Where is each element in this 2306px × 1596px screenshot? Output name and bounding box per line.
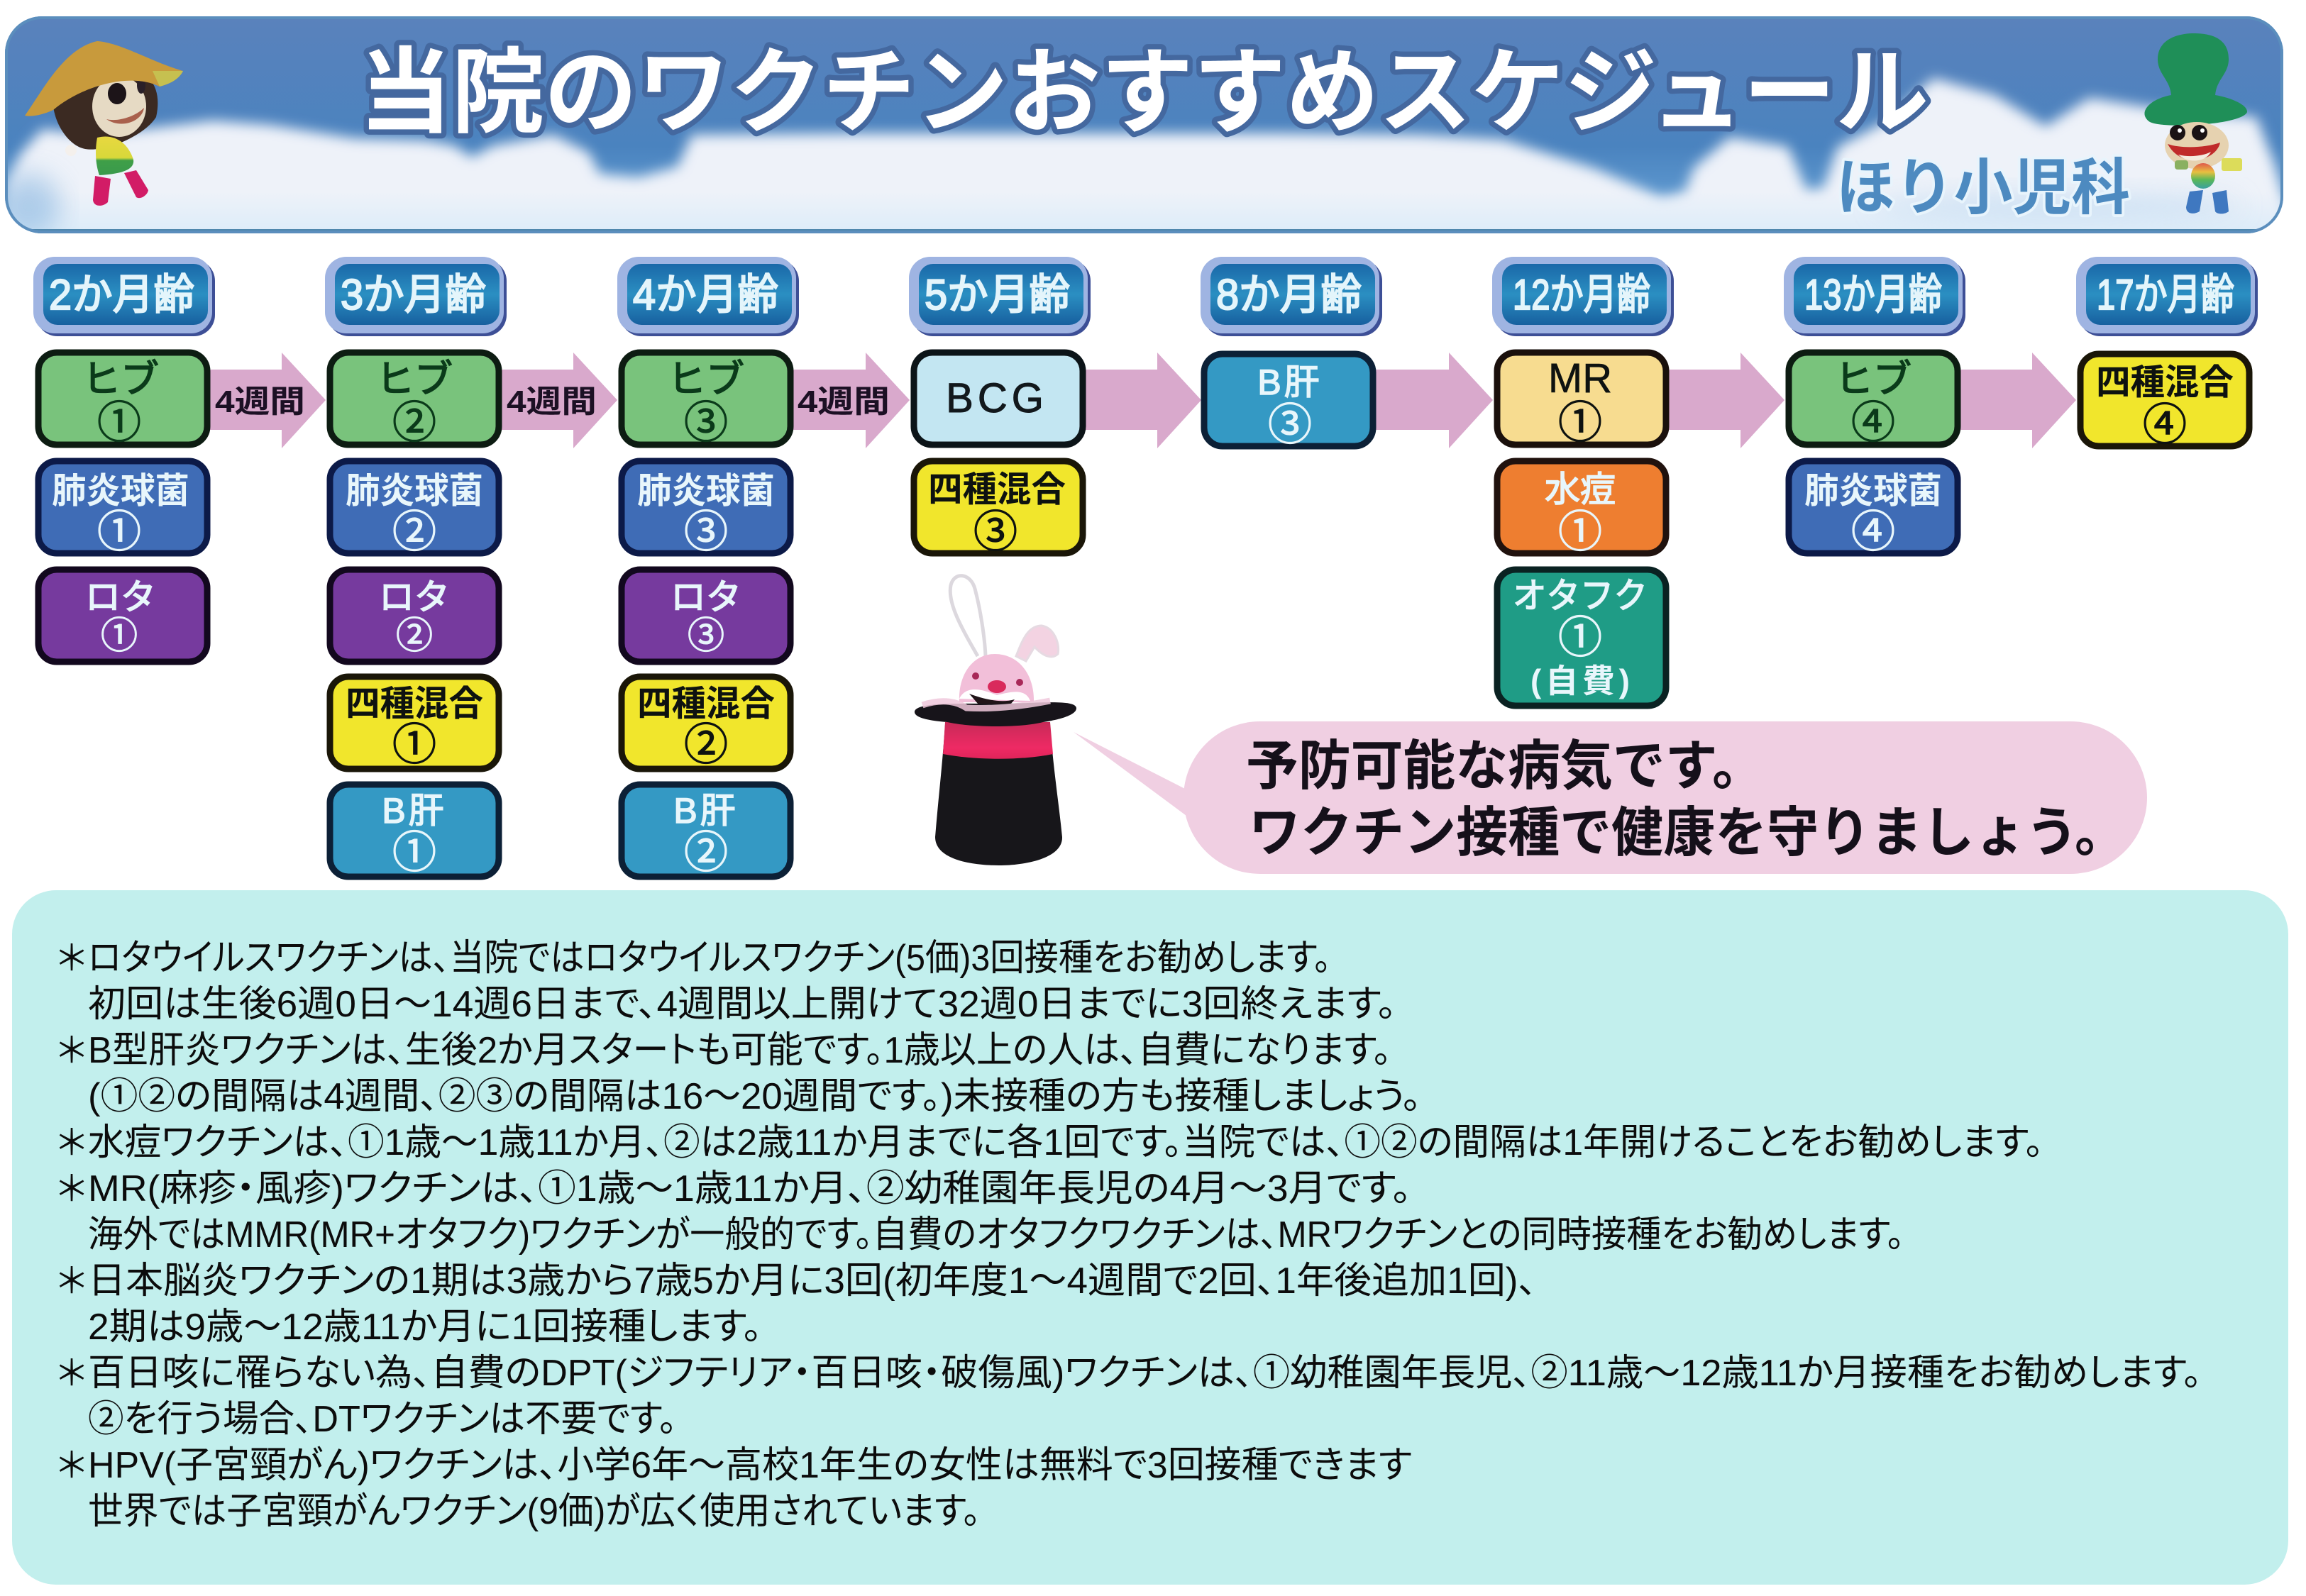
box: rota 2: ロタ (379, 577, 450, 617)
arrow: 4 to 5 months, 4 weeks: 4週間 (798, 384, 890, 419)
box: varicella 1 (1497, 461, 1666, 557)
box: pneumococcal 3 (622, 461, 790, 557)
box: MR 1: ① (1558, 399, 1602, 448)
box: DPT-IPV 4: ④ (2143, 401, 2187, 450)
arrow: 8 to 12 months (1374, 353, 1493, 448)
box: DPT-IPV 3: ③ (973, 508, 1017, 557)
note: hepatitis B: ＊ (54, 1031, 89, 1070)
box: Hib 3: ヒブ (668, 358, 744, 401)
age badge: 2 months (33, 257, 215, 336)
note: MR: 海外ではMMR(MR+オタフク)ワクチンが一般的です。自費のオタフクワクチンは、MRワクチンとの同時接種をお勧めします。 (88, 1214, 1904, 1256)
box: hepatitis B 3: B肝 (1257, 362, 1323, 402)
box: rota 1: ① (101, 616, 138, 657)
arrow: 2 to 3 months, 4 weeks: 4週間 (215, 384, 305, 419)
arrow: 2 to 3 months, 4 weeks (209, 353, 326, 448)
box: DPT-IPV 2: 四種混合 (637, 684, 775, 724)
callout: speech bubble: ワクチン接種で健康を守りましょう。 (1249, 803, 2126, 863)
arrow: 5 to 8 months (1083, 353, 1201, 448)
box: pneumococcal 4: 肺炎球菌 (1804, 471, 1942, 511)
note: MR: MR(麻疹・風疹)ワクチンは、①1歳～1歳11か月、②幼稚園年長児の4月～3月です。 (88, 1168, 1411, 1209)
box: mumps 1 self-paid (1497, 570, 1666, 706)
age badge: 3 months (325, 257, 507, 336)
age badge: 3 months: 3か月齢 (341, 271, 486, 318)
box: mumps 1 self-paid: ① (1558, 614, 1602, 663)
box: DPT-IPV 4 (2080, 354, 2249, 450)
box: DPT-IPV 2 (622, 677, 790, 770)
icon: girl character with straw hat (25, 41, 183, 206)
box: hepatitis B 3 (1204, 354, 1373, 450)
callout: speech bubble: 予防可能な病気です。 (1246, 736, 1765, 797)
note: rotavirus: ＊ (54, 938, 89, 978)
note: DPT (54, 1353, 2202, 1440)
title: 当院のワクチンおすすめスケジュール (359, 40, 1929, 145)
arrow: 3 to 4 months, 4 weeks (500, 353, 617, 448)
box: pneumococcal 1: 肺炎球菌 (52, 471, 189, 511)
box: hepatitis B 1 (330, 785, 499, 877)
box: DPT-IPV 3 (914, 461, 1083, 557)
age badge: 13 months (1784, 257, 1965, 336)
box: BCG (914, 353, 1083, 445)
box: Hib 2 (330, 353, 499, 448)
note: Japanese encephalitis: 2期は9歳～12歳11か月に1回接種します。 (88, 1307, 762, 1348)
note: Japanese encephalitis (54, 1260, 1537, 1348)
note: DPT: ＊ (54, 1353, 89, 1393)
box: rota 3 (622, 570, 790, 662)
arrow: 13 to 17 months (1958, 353, 2076, 448)
box: DPT-IPV 1: ① (392, 721, 436, 770)
note: rotavirus: 初回は生後6週0日～14週6日まで、4週間以上開けて32週0日までに3回終えます。 (88, 984, 1396, 1025)
icon: boy character with green hat (2144, 33, 2247, 214)
arrow: 3 to 4 months, 4 weeks: 4週間 (507, 384, 597, 419)
age badge: 2 months: 2か月齢 (49, 271, 194, 318)
box: Hib 3 (622, 353, 790, 448)
box: DPT-IPV 2: ② (684, 721, 728, 770)
box: DPT-IPV 1: 四種混合 (346, 684, 483, 724)
box: rota 2 (330, 570, 499, 662)
box: Hib 4: ④ (1851, 399, 1895, 448)
box: rota 1 (38, 570, 207, 662)
box: pneumococcal 2: 肺炎球菌 (346, 471, 483, 511)
box: BCG: BCG (946, 375, 1048, 421)
header banner (0, 16, 2288, 241)
box: mumps 1 self-paid: オタフク (1513, 576, 1648, 616)
note: DPT: 百日咳に罹らない為、自費のDPT(ジフテリア・百日咳・破傷風)ワクチンは、①幼稚園年長児、②11歳～12歳11か月接種をお勧めします。 (88, 1353, 2202, 1394)
age badge: 8 months (1201, 257, 1382, 336)
arrow: 12 to 13 months (1667, 353, 1784, 448)
note: Japanese encephalitis: ＊ (54, 1261, 89, 1301)
box: Hib 1: ヒブ (82, 358, 159, 401)
box: pneumococcal 4: ④ (1851, 508, 1895, 557)
box: DPT-IPV 3: 四種混合 (928, 470, 1066, 509)
note: MR: ＊ (54, 1169, 89, 1209)
icon: rabbit in magician's hat (915, 576, 1076, 865)
box: Hib 2: ヒブ (376, 358, 453, 401)
age badge: 5 months: 5か月齢 (925, 271, 1070, 318)
panel: notes (12, 890, 2288, 1585)
box: hepatitis B 2: ② (684, 829, 728, 877)
box: rota 3: ロタ (671, 577, 741, 617)
box: pneumococcal 2: ② (392, 508, 436, 557)
note: hepatitis B: B型肝炎ワクチンは、生後2か月スタートも可能です。1歳以上の人は、自費になります。 (88, 1030, 1391, 1071)
age badge: 12 months: 12か月齢 (1513, 271, 1650, 318)
clinic name: ほり小児科 (1836, 154, 2130, 222)
box: Hib 1 (38, 353, 207, 448)
note: hepatitis B: (①②の間隔は4週間、②③の間隔は16～20週間です。)未接種の方も接種しましょう。 (88, 1076, 1421, 1117)
box: Hib 3: ③ (684, 399, 728, 448)
note: DPT: ②を行う場合、DTワクチンは不要です。 (88, 1399, 677, 1440)
age badge: 4 months (617, 257, 799, 336)
note: rotavirus (54, 938, 1396, 1025)
note: HPV: ＊ (54, 1446, 89, 1485)
box: pneumococcal 4 (1789, 461, 1958, 557)
note: varicella: 水痘ワクチンは、①1歳～1歳11か月、②は2歳11か月までに各1回です。当院では、①②の間隔は1年開けることをお勧めします。 (88, 1122, 2043, 1163)
box: DPT-IPV 4: 四種混合 (2096, 362, 2234, 402)
age badge: 5 months (909, 257, 1091, 336)
box: mumps 1 self-paid: (自費) (1530, 663, 1630, 699)
box: varicella 1: 水痘 (1545, 470, 1616, 509)
note: MR (54, 1168, 1904, 1256)
age badge: 4 months: 4か月齢 (633, 271, 778, 318)
note: HPV: 世界では子宮頸がんワクチン(9価)が広く使用されています。 (88, 1491, 981, 1532)
box: Hib 4 (1789, 353, 1958, 448)
age badge: 17 months: 17か月齢 (2097, 271, 2234, 318)
box: hepatitis B 1: B肝 (382, 791, 447, 831)
box: Hib 4: ヒブ (1835, 358, 1911, 401)
box: pneumococcal 1: ① (97, 508, 141, 557)
box: hepatitis B 2: B肝 (673, 791, 739, 831)
age badge: 8 months: 8か月齢 (1216, 271, 1362, 318)
box: MR 1 (1497, 353, 1666, 448)
note: varicella: ＊ (54, 1123, 89, 1163)
box: rota 3: ③ (688, 616, 724, 657)
age badge: 17 months (2076, 257, 2258, 336)
box: DPT-IPV 1 (330, 677, 499, 770)
box: rota 2: ② (396, 616, 433, 657)
box: rota 1: ロタ (85, 577, 156, 617)
note: Japanese encephalitis: 日本脳炎ワクチンの1期は3歳から7歳5か月に3回(初年度1～4週間で2回、1年後追加1回)、 (88, 1260, 1537, 1302)
box: Hib 1: ① (97, 399, 141, 448)
box: pneumococcal 1 (38, 461, 207, 557)
box: hepatitis B 1: ① (392, 829, 436, 877)
box: hepatitis B 3: ③ (1268, 401, 1312, 450)
age badge: 12 months (1492, 257, 1674, 336)
box: pneumococcal 2 (330, 461, 499, 557)
box: pneumococcal 3: 肺炎球菌 (637, 471, 775, 511)
note: HPV (54, 1445, 1412, 1532)
note: rotavirus: ロタウイルスワクチンは、当院ではロタウイルスワクチン(5価)3回接種をお勧めします。 (88, 938, 1331, 979)
arrow: 4 to 5 months, 4 weeks (791, 353, 910, 448)
age badge: 13 months: 13か月齢 (1804, 271, 1942, 318)
box: hepatitis B 2 (622, 785, 790, 877)
note: hepatitis B (54, 1030, 1421, 1117)
box: varicella 1: ① (1558, 508, 1602, 557)
note: HPV: HPV(子宮頸がん)ワクチンは、小学6年～高校1年生の女性は無料で3回接種できます (88, 1445, 1412, 1486)
box: Hib 2: ② (392, 399, 436, 448)
callout: speech bubble (1074, 721, 2147, 874)
box: pneumococcal 3: ③ (684, 508, 728, 557)
box: MR 1: MR (1548, 355, 1612, 401)
